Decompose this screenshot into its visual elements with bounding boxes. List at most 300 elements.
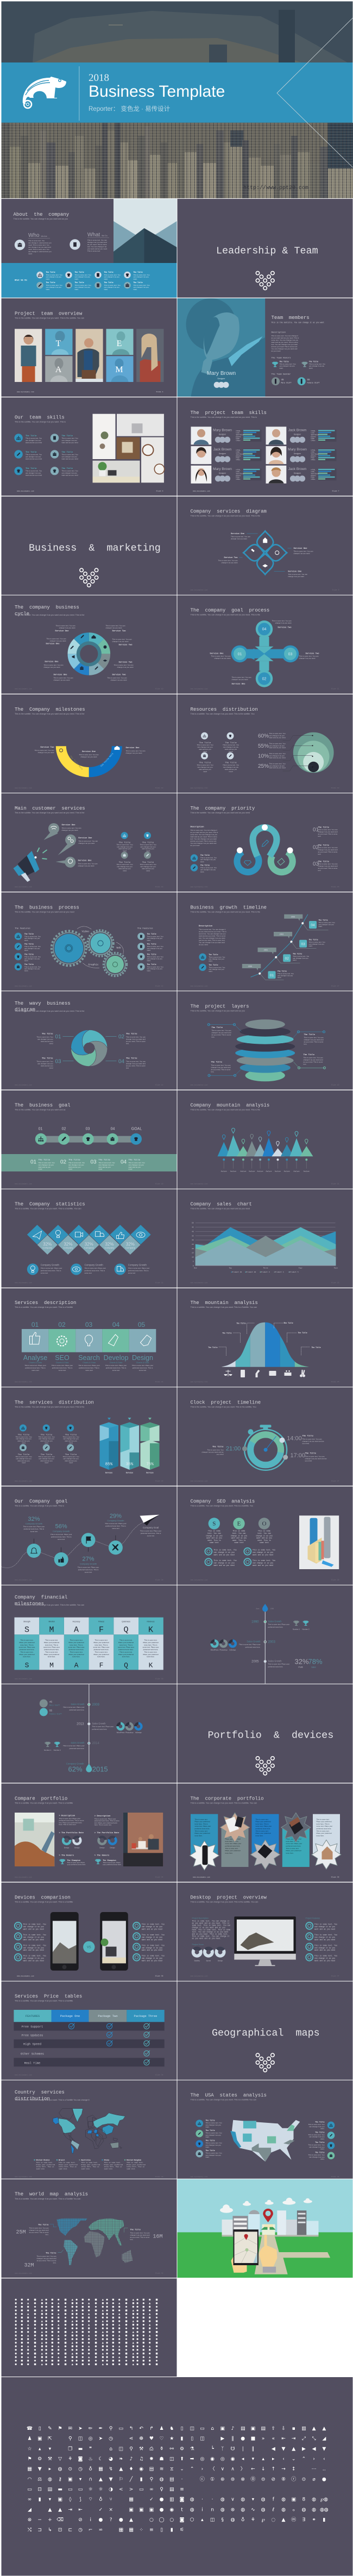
- title: The mountain analysis: [190, 1300, 258, 1306]
- who we are: can change it. want and as you: [28, 250, 52, 253]
- icon grid as glyphs: ◢ ▲▲⇥⇤ ✓× ▣▣▣●◉t◍in◍⊛◍∿◍ℓ◍ℴ◍◍◍◍: [28, 2507, 329, 2512]
- node 2013: preferred texts here.: [92, 1728, 107, 1730]
- portfolio column 4: some text. Place your: [286, 1842, 302, 1845]
- ring icon list: want and as you need: [253, 1564, 273, 1566]
- table: Place your preferred: [143, 1641, 159, 1644]
- icons grid: want.: [46, 278, 50, 280]
- timeline chart: The Title: [308, 938, 318, 941]
- project features: can change it as you: [314, 1926, 335, 1928]
- table: This is some text.: [70, 1651, 83, 1653]
- growth items: This is some text. Place your: [41, 1267, 62, 1269]
- footer: www.mycompany.com: [17, 490, 34, 492]
- skills list: The Title: [26, 451, 37, 454]
- clock labels: This is some text. You can: [305, 1455, 325, 1457]
- icon text grid: want and as you: [17, 1440, 30, 1442]
- timeline chart: 2000: [248, 966, 252, 968]
- node 2005: [251, 1660, 289, 1668]
- price table: Package Three: [134, 2014, 157, 2018]
- service labels: This is some text. You can: [218, 560, 238, 562]
- team gender: 45: [281, 378, 284, 381]
- green band: need: [68, 1168, 72, 1170]
- heading: Team members: [272, 315, 310, 321]
- numbered columns: preferred texts here. This is: [52, 1367, 73, 1369]
- gender ellipses: Male Staff: [49, 1704, 60, 1707]
- service icons grid: want and as you: [142, 848, 154, 850]
- title: diagram: [15, 1007, 35, 1012]
- table: texts here.: [48, 1656, 55, 1658]
- subtitle: This is the subtitle. You can change it as you want and as you need. This is the: [15, 713, 84, 715]
- cycle labels: change it as you want: [105, 627, 122, 629]
- person card 3: jQuery: [236, 455, 241, 457]
- icons grid: The Title: [75, 281, 84, 284]
- growth items: some text: [128, 1272, 135, 1274]
- swirl labels: as you need. This is some: [126, 1040, 146, 1042]
- who we are: need. This is some text. You: [28, 248, 49, 250]
- area chart: Two: [229, 1268, 232, 1269]
- skills list: The Title: [62, 435, 73, 437]
- skills list: want and as you need: [62, 474, 78, 476]
- icon text grid: The Title: [41, 1453, 53, 1456]
- feature list left: want.: [24, 949, 28, 951]
- service icons grid: The Title: [119, 841, 131, 844]
- person card 3: Wolf Script: [236, 453, 244, 455]
- cycle labels: change it as you want: [117, 666, 134, 668]
- donut trio: InDesign: [135, 1732, 142, 1734]
- node 2014: This is some text. Place your: [63, 1745, 85, 1747]
- node 1990: preferred texts here.: [268, 1626, 283, 1628]
- panel: vertical timeline part two: [1, 1684, 177, 1783]
- project description: some text. This is some text. You can: [192, 1925, 230, 1927]
- table: A: [74, 1626, 79, 1635]
- stopwatch: [242, 1425, 288, 1471]
- person card 2: CSS: [311, 431, 314, 434]
- portfolio column 4: preferred texts here.: [286, 1845, 301, 1847]
- timeline chart: The Title: [318, 919, 328, 921]
- area chart: 40: [192, 1231, 194, 1232]
- skills list: can change it as you: [62, 455, 77, 457]
- stat percentages: [294, 1658, 323, 1669]
- subtitle: This is a subtitle. You can change it as you want. This is a Subtitle You can change it: [15, 2099, 89, 2101]
- cycle labels: This is some text. You can: [114, 664, 134, 666]
- project score: Speed: [206, 1960, 211, 1962]
- area chart: 5: [193, 1261, 194, 1262]
- feature list left: can change it as you: [24, 958, 40, 960]
- title: milestones: [15, 1601, 44, 1607]
- milestones labels: This is some text. You can: [35, 749, 54, 751]
- swirl labels: need: [49, 1042, 53, 1044]
- icon grid as glyphs: ♟▣⇱ ⚲◫◎➤◷ ⋖☸♥♡★▮▯◫ ▶‖●■»«⇤⇥⤢⤡◢: [27, 2436, 326, 2442]
- price table: Package Two: [98, 2014, 118, 2018]
- cycle labels: Service One: [55, 630, 69, 632]
- process labels: change it as you want: [275, 622, 292, 624]
- what we do text: text. You can change it as: [87, 246, 107, 248]
- callout 25M: as you need. This is some: [29, 2232, 49, 2234]
- subtitle: This is a subtitle. You can change it as you want. This is the subtitle. You can: [190, 1901, 258, 1903]
- icon: heart of rings: [256, 271, 274, 290]
- seo letters: some text: [234, 1541, 244, 1544]
- person card 2: jQuery: [311, 435, 316, 437]
- icons grid: This is some text. You: [75, 274, 91, 276]
- process labels: This is some text. You can: [272, 620, 292, 622]
- numbered columns: Design: [132, 1354, 153, 1362]
- seo letters: [206, 1518, 273, 1544]
- footer: www.mycompany.com: [190, 1083, 207, 1086]
- portfolio column 4: texts here. This is: [286, 1840, 299, 1842]
- person card 6: Wolf Script: [311, 472, 319, 474]
- icon text grid: The Title: [18, 1433, 30, 1436]
- team honors: [272, 356, 325, 369]
- person card 6: Office: [311, 478, 316, 480]
- icons grid: The Title: [75, 271, 84, 273]
- swirl labels: 04: [118, 1058, 125, 1064]
- cycle labels: Service One: [46, 643, 60, 645]
- milestones labels: [35, 746, 146, 758]
- icon text grid: need: [22, 1442, 26, 1444]
- panel: company business cycle: [1, 596, 177, 694]
- who we are: This is some text. You: [28, 240, 45, 242]
- icon text grid: This is some text. You: [223, 744, 239, 746]
- panel: project team overview: [1, 298, 177, 397]
- portfolio column 5: Place your preferred: [316, 1821, 332, 1823]
- subtitle: This is the subtitle. You can change it as you want. This is the subtitle. You: [190, 1406, 256, 1408]
- icon text grid: can change it as you: [197, 766, 213, 768]
- end marker: 62%: [68, 1765, 83, 1773]
- team honors: The Team Honors: [272, 356, 291, 360]
- service icons grid: can change it as you: [117, 866, 133, 868]
- state list right: The Title: [315, 2131, 325, 2133]
- percentages: can change it as you: [269, 755, 285, 757]
- subtitle: This is a subtitle. You can change it as you want. This is a Subtitle. You can: [190, 1306, 257, 1308]
- node 2003: [239, 1640, 276, 1648]
- icon text grid: [15, 1425, 79, 1464]
- phone right: [100, 1912, 128, 1971]
- portfolio column 1: preferred texts here.: [194, 1828, 210, 1830]
- swirl labels: This is some text. You can: [126, 1060, 146, 1062]
- small items: This is some text. You: [200, 867, 217, 869]
- subtitle: This is a subtitle. You can change it as you want. This is a Subtitle. You can: [190, 1802, 257, 1804]
- cycle labels: Service One: [53, 674, 67, 676]
- legend: ■Product 5: [289, 1271, 299, 1273]
- panel: leadership and team divider: [177, 199, 353, 298]
- node 2003: 2003: [268, 1641, 276, 1644]
- bell labels: The Title: [236, 1323, 246, 1325]
- callout 16M: text.: [130, 2239, 133, 2241]
- service icons grid: want and as you: [118, 868, 131, 870]
- process labels: This is some text. You can: [299, 655, 319, 657]
- feature list right: The Title: [147, 933, 156, 935]
- timeline chart: can change it as you: [308, 943, 324, 945]
- panel: vertical timeline part one: [177, 1585, 353, 1684]
- timeline chart: can change it as you: [318, 924, 334, 926]
- person card 5: Wolf Script: [236, 472, 244, 474]
- portfolio column 3: Place your preferred: [255, 1821, 271, 1823]
- icon text grid: want and as you: [40, 1459, 53, 1462]
- team gender: Female Staff: [307, 381, 320, 384]
- goal stats: preferred texts here. This is: [24, 1528, 45, 1530]
- icon text grid: need: [69, 1462, 73, 1464]
- icons grid: This is some text. You: [75, 284, 91, 286]
- swirl labels: want and as you: [41, 1040, 53, 1042]
- who we are: need.: [28, 253, 33, 255]
- seo letters: some text: [210, 1541, 219, 1544]
- table: preferred texts here.: [94, 1649, 109, 1651]
- person card 1: PSD: [236, 437, 240, 440]
- portfolio column 5: texts here.: [316, 1834, 324, 1837]
- price table: Real Time: [24, 2061, 40, 2065]
- callout 25M: The Title: [38, 2224, 49, 2227]
- table: texts here.: [147, 1656, 155, 1658]
- numbered columns: Charts & Data: [83, 1362, 96, 1364]
- title: Services Price tables: [15, 1994, 82, 2000]
- end marker: [66, 1763, 108, 1773]
- table: This is some text.: [94, 1651, 108, 1653]
- half ring chart: The Title Here: [100, 753, 115, 768]
- left list: This is some text. You: [23, 1934, 46, 1936]
- left list: want and as you need: [23, 1928, 44, 1930]
- map legend: texts here. This is: [36, 2166, 54, 2168]
- percentages: can change it as you: [269, 744, 285, 747]
- diamond chart: 32%: [64, 1242, 73, 1247]
- area chart: 10: [192, 1257, 194, 1258]
- callout 32M: [24, 2250, 63, 2269]
- table: S: [25, 1662, 29, 1670]
- milestones labels: Service One: [126, 747, 140, 749]
- swirl labels: The Title: [126, 1057, 137, 1060]
- timeline chart: This is some text. You: [308, 941, 325, 943]
- priority list: 03: [313, 861, 319, 867]
- footer: www.mycompany.com: [17, 391, 34, 393]
- cycle labels: change it as you want: [112, 641, 129, 643]
- petal diagram: [243, 531, 287, 574]
- slide number: Slide 24: [155, 1381, 163, 1383]
- footer: www.mycompany.com: [190, 1381, 207, 1383]
- layer callouts: This is some text. You can: [212, 1029, 231, 1031]
- milestones labels: This is some text. You can: [126, 750, 146, 752]
- seo letters: text. You can: [207, 1532, 221, 1534]
- bell chart: [222, 1321, 310, 1367]
- service labels: change it as you want: [288, 575, 304, 578]
- map legend: United Kingdom: [127, 2159, 141, 2161]
- layer callouts: This is some text. You can: [304, 1036, 324, 1038]
- feature list right: want.: [147, 970, 151, 972]
- clock labels: This is some text. You can: [302, 1438, 322, 1440]
- gender ellipses: 45: [49, 1701, 53, 1703]
- what we do text: What We Do: [87, 232, 108, 238]
- compare column two: Design: [110, 1846, 115, 1848]
- state list right: can change it as you: [309, 2146, 325, 2148]
- person card 2: Designer: [294, 433, 301, 435]
- cycle labels: change it as you want: [111, 679, 127, 681]
- icon text grid: This is some text. You: [38, 1456, 55, 1458]
- numbered columns: 02: [58, 1321, 66, 1328]
- timeline chart: 03: [301, 942, 305, 946]
- small items: can change it as you: [200, 858, 216, 861]
- company goal text: preferred texts here. This is: [141, 1532, 161, 1534]
- node 1990: Number 2: [302, 1628, 310, 1631]
- milestones labels: This is some text. You can: [79, 754, 99, 756]
- icon: megaphone: [13, 848, 47, 882]
- name: Mary Brown: [207, 371, 236, 377]
- right list: want and as you need: [142, 1959, 162, 1961]
- who we are: Who We Are: [28, 233, 47, 239]
- map legend: This is some text.: [59, 2161, 75, 2164]
- small items: want.: [200, 870, 204, 873]
- photo: man in plaid: [75, 329, 103, 382]
- slide number: Slide 12: [155, 787, 163, 789]
- small items: can change it as you: [200, 869, 216, 871]
- callout 32M: The Title: [46, 2252, 56, 2255]
- subtitle: This is the subtitle. You can change it as you want and as you need: [190, 812, 250, 814]
- icon grid as glyphs: ▦▼▸◍⊙◷♁▦↯▲♦◉▤≋⧖⌄⌃›〈∨∧〉←↓↑→↕ ⋯‥: [27, 2466, 326, 2472]
- person card 1: jQuery: [236, 435, 241, 437]
- slide number: Slide 15: [331, 886, 339, 888]
- seo letters: S: [212, 1521, 216, 1527]
- donut trio: Photoshop: [219, 1649, 228, 1651]
- icon text grid: need: [229, 770, 233, 773]
- table: some text. Place your: [19, 1646, 35, 1649]
- team honors: want.: [279, 367, 283, 369]
- slide number: Slide 42: [155, 2272, 163, 2274]
- feature list right: want.: [147, 949, 151, 951]
- description: This is some text. You can change it: [272, 335, 298, 337]
- panel: wavy business diagram: [1, 991, 177, 1089]
- panel: main customer services: [1, 793, 177, 892]
- diamond chart: 32%: [43, 1242, 52, 1247]
- swirl labels: text.: [126, 1042, 129, 1044]
- left list: want and as you need: [23, 1949, 44, 1951]
- priority list: This is some text. You can: [318, 863, 338, 865]
- callout 25M: text.: [46, 2234, 49, 2236]
- subtitle: This is a subtitle. You can change it as you want. This is a Subtitle. You: [190, 1505, 253, 1507]
- skills list: This is some text. You: [62, 469, 78, 472]
- icons grid: The Title: [46, 271, 55, 273]
- tile T: T: [56, 339, 61, 348]
- subtitle: This is the subtitle. You can change it as you want and as you need: [190, 1208, 250, 1210]
- numbered columns: some text: [31, 1369, 39, 1371]
- service icons grid: [116, 832, 156, 872]
- subtitle: This is the subtitle. You can change it as you want and as you need. This is the: [15, 1010, 84, 1012]
- numbered columns: Charts & Data: [29, 1362, 42, 1364]
- project features: [305, 1917, 337, 1961]
- icon text grid: The Title: [41, 1433, 53, 1436]
- compare column two: This is some text. Place your: [94, 1817, 116, 1820]
- stacked ellipses: [235, 1019, 295, 1081]
- subtitle: This is the subtitle. You can change it as you want and as you need. This is the: [190, 515, 260, 517]
- compare column one: > The Honors: [59, 1854, 74, 1857]
- icons grid: This is some text. You: [46, 274, 62, 276]
- icon text grid: can change it as you: [223, 766, 238, 768]
- small items: This is some text. You: [209, 956, 225, 958]
- icons grid: This is some text. You: [46, 284, 62, 286]
- green band: want and as you: [98, 1166, 111, 1168]
- slide number: Slide 28: [155, 1579, 163, 1581]
- panel: project team skills: [177, 397, 353, 496]
- priority list: change it as you want and: [318, 849, 338, 851]
- compare column two: preferred texts here. This is some: [94, 1820, 119, 1822]
- priority list: The Title: [318, 844, 330, 847]
- icon text grid: want and as you: [199, 768, 211, 770]
- green band: [1, 1154, 177, 1171]
- photo collage: [92, 414, 165, 482]
- layer callouts: text.: [303, 1063, 306, 1065]
- project description: need. This is some text. This is some: [192, 1929, 230, 1931]
- icon text grid: The Title: [65, 1433, 77, 1436]
- timeline axis: [265, 1609, 266, 1684]
- swirl labels: want and as you: [41, 1064, 53, 1067]
- half ring chart: The Title Here: [69, 755, 84, 771]
- seo letters: change it as you: [206, 1534, 223, 1537]
- portfolio column 4: Place your preferred: [286, 1838, 301, 1840]
- timeline chart: want.: [293, 959, 297, 961]
- state list right: want.: [320, 2128, 325, 2130]
- goal stats: This is some text. Place your: [23, 1526, 45, 1528]
- project description: This is some text. You can change it: [192, 1920, 229, 1922]
- description: as you want and as you need. This is: [199, 930, 226, 932]
- swirl labels: The Title: [42, 1032, 53, 1035]
- area chart: One: [194, 1268, 197, 1269]
- swirl labels: This is some text. You: [36, 1060, 53, 1062]
- description: some text. You can change it as you: [272, 339, 298, 341]
- subtitle: This is the subtitle. You can change it as you want and as you: [190, 1010, 245, 1012]
- compare column one: [59, 1814, 86, 1866]
- icons grid: The Title: [134, 281, 143, 284]
- icons grid: This is some text. You: [134, 284, 150, 286]
- photo: glass building: [114, 199, 177, 263]
- map legend: texts here. This is: [127, 2166, 144, 2168]
- icons grid: This is some text. You: [104, 284, 121, 286]
- subtitle: This is the subtitle. You can change it as you want and as: [15, 1109, 66, 1111]
- layer callouts: as you need. This is some: [303, 1061, 323, 1063]
- growth items: preferred texts here. This is: [128, 1269, 149, 1271]
- table: Accuracy: [73, 1621, 80, 1623]
- feature list left: [15, 927, 41, 972]
- numbered columns: preferred texts here. This is: [25, 1367, 46, 1369]
- team honors: want.: [309, 367, 313, 369]
- right list: This is some text. You: [142, 1944, 165, 1946]
- priority list: as you need. This is some: [318, 833, 338, 835]
- map legend: Place your preferred: [36, 2164, 55, 2166]
- table: texts here.: [72, 1656, 80, 1658]
- gender ellipses: 55: [49, 1709, 53, 1712]
- title: The business goal: [15, 1103, 71, 1108]
- process labels: change it as you want: [215, 657, 231, 660]
- icons grid: can change it as you: [75, 276, 90, 278]
- green band: can change it as you: [38, 1164, 54, 1166]
- seo letters: need. This is: [257, 1539, 271, 1541]
- green band: want and as you: [38, 1166, 51, 1168]
- description: want and as you need. This is some: [272, 341, 298, 343]
- diamond chart: 32%: [126, 1242, 135, 1247]
- ring icon list: want and as you need: [214, 1564, 235, 1566]
- portfolio column 3: texts here.: [255, 1834, 263, 1837]
- timeline chart: 2002: [280, 933, 283, 936]
- icon grid as glyphs: ☆▴▾ ❐▬❞ ⌂◫⚲⚒⎙⚱⚯⚙⚗ ┕ᛉ☋∣‖ ◀▼▲▶◀▼: [27, 2445, 326, 2452]
- person card 4: Designer: [294, 453, 301, 455]
- ring icon list: This is some text. You: [253, 1549, 275, 1551]
- clock labels: This is some text. You: [207, 1449, 224, 1451]
- title: The world map analysis: [15, 2192, 88, 2197]
- node 2009: [63, 1703, 100, 1711]
- goal track: 02: [62, 1127, 66, 1131]
- state list right: can change it as you: [309, 2156, 325, 2158]
- goal track: [35, 1127, 142, 1145]
- green band: 04: [121, 1159, 127, 1165]
- what we do label: What We Do: [15, 279, 28, 281]
- icon text grid: want and as you: [17, 1459, 30, 1462]
- percentages: want and as you need: [269, 737, 286, 739]
- person card 5: Designer: [219, 472, 226, 474]
- speech bubbles: This is some text. You can: [78, 840, 98, 842]
